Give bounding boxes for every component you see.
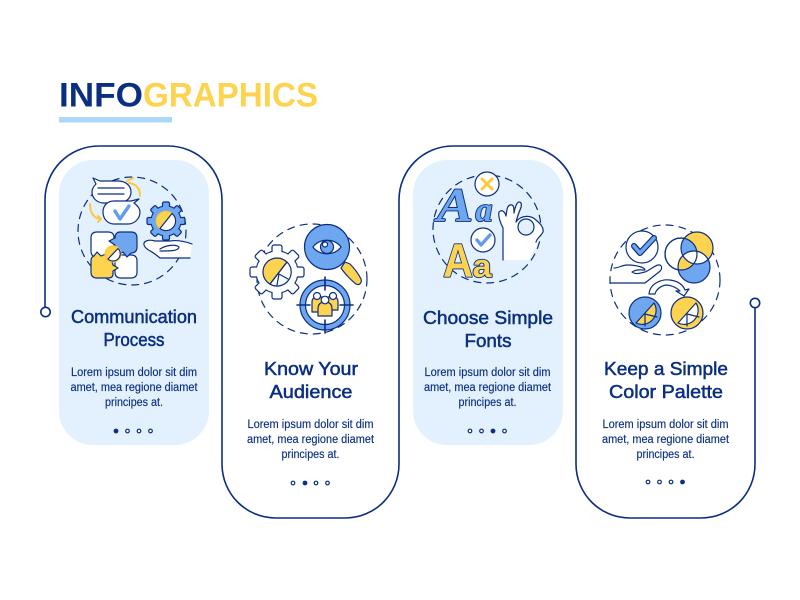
panel: communication process bbox=[59, 160, 209, 445]
body text: Lorem ipsum dolor sit dim bbox=[602, 419, 728, 431]
title: GRAPHICS bbox=[143, 76, 318, 114]
icon: choose simple fonts: a bbox=[472, 248, 492, 284]
body text bbox=[70, 367, 198, 409]
body text: Lorem ipsum dolor sit dim bbox=[71, 367, 197, 379]
heading: Keep a Simple bbox=[604, 359, 728, 379]
body text: amet, mea regione diamet bbox=[424, 382, 552, 394]
heading line 2: Fonts bbox=[464, 331, 512, 351]
heading line 2: Color Palette bbox=[609, 382, 723, 402]
icon: keep a simple color palette bbox=[610, 225, 720, 335]
connecting outline bbox=[45, 146, 755, 518]
body text: amet, mea regione diamet bbox=[70, 382, 198, 394]
body text: principes at. bbox=[105, 397, 163, 409]
heading line 2: Audience bbox=[270, 382, 352, 402]
panel: keep a simple color palette bbox=[602, 225, 730, 484]
panel: choose simple fonts bbox=[413, 160, 563, 445]
title bbox=[59, 76, 318, 114]
heading: Communication bbox=[71, 307, 197, 327]
pagination dots bbox=[468, 429, 506, 433]
body text: principes at. bbox=[636, 449, 694, 461]
icon: choose simple fonts: A bbox=[434, 179, 473, 232]
body text: amet, mea regione diamet bbox=[602, 434, 730, 446]
body text: Lorem ipsum dolor sit dim bbox=[424, 367, 550, 379]
body text bbox=[602, 419, 730, 461]
panel: know your audience bbox=[247, 224, 375, 485]
pagination dots bbox=[291, 481, 329, 485]
pagination dots bbox=[114, 429, 152, 433]
icon: choose simple fonts: a bbox=[476, 192, 492, 229]
title: INFO bbox=[59, 76, 143, 114]
title underline bbox=[59, 117, 172, 122]
body text: amet, mea regione diamet bbox=[247, 434, 375, 446]
icon: choose simple fonts bbox=[433, 172, 543, 287]
icon: communication process bbox=[78, 177, 192, 285]
end node bbox=[750, 298, 760, 308]
body text: Lorem ipsum dolor sit dim bbox=[248, 419, 374, 431]
body text bbox=[247, 419, 375, 461]
icon: choose simple fonts: A bbox=[443, 234, 473, 287]
icon: know your audience bbox=[250, 224, 367, 334]
body text bbox=[424, 367, 552, 409]
body text: principes at. bbox=[282, 449, 340, 461]
heading line 2: Process bbox=[104, 330, 164, 350]
pagination dots bbox=[646, 480, 684, 484]
start node bbox=[41, 307, 50, 317]
body text: principes at. bbox=[458, 397, 516, 409]
heading: Know Your bbox=[264, 359, 358, 379]
heading: Choose Simple bbox=[423, 308, 553, 328]
